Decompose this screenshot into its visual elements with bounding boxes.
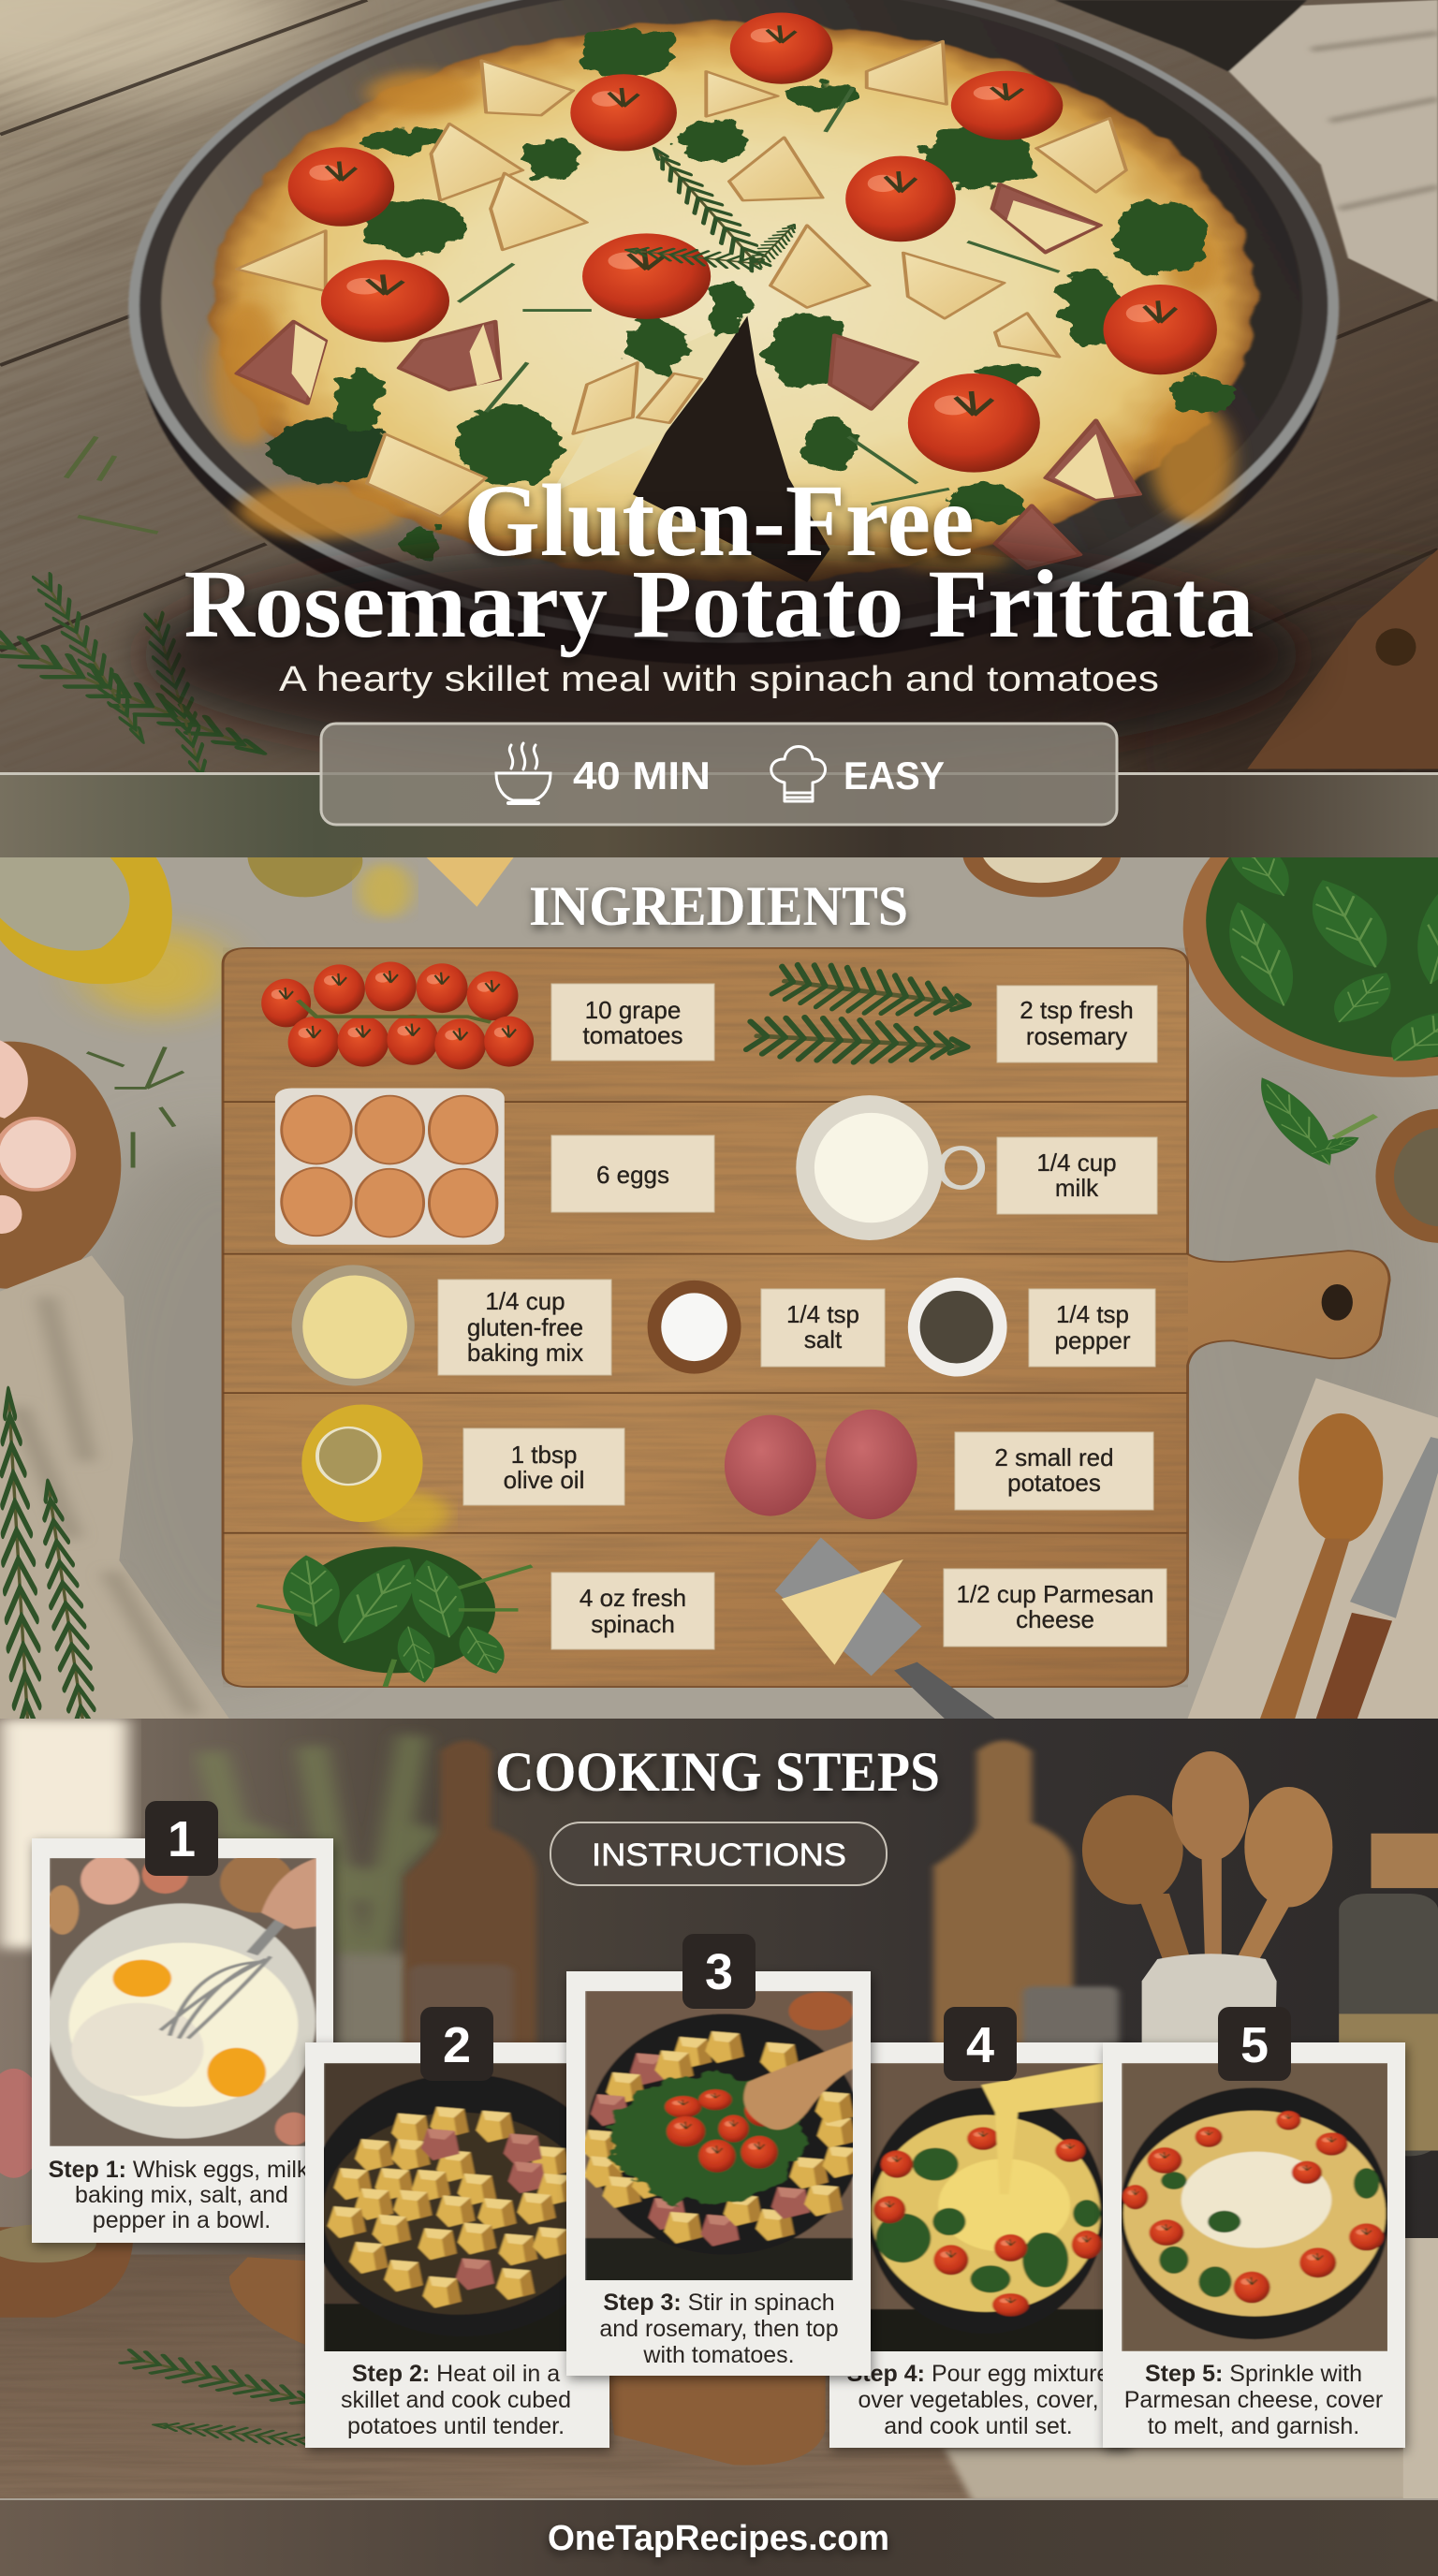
dark scrim behind title	[140, 543, 1301, 768]
wooden spoon	[1260, 1413, 1383, 1719]
step 1 text: baking mix, salt, and	[75, 2182, 288, 2208]
pepper bowl	[908, 1278, 1007, 1377]
potatoes	[481, 61, 573, 115]
step 5 text: to melt, and garnish.	[1148, 2413, 1359, 2439]
footer band	[0, 2498, 1438, 2576]
step 2 photo	[307, 2063, 619, 2353]
red potatoes	[725, 1410, 917, 1519]
step 3 card	[566, 1934, 871, 2376]
badge 3	[682, 1934, 756, 2009]
ingredient labels	[438, 984, 1167, 1649]
countertop background and props	[0, 781, 1438, 1732]
spinach	[268, 27, 1235, 558]
subtitle: A hearty skillet meal with spinach and tomatoes	[279, 660, 1159, 699]
badge 5	[1218, 2007, 1291, 2081]
label: spinach: spinach	[591, 1610, 675, 1638]
ingredients section	[0, 781, 1438, 1732]
icon: chef hat	[771, 747, 826, 801]
blurred plant	[211, 1735, 431, 2063]
step 3 text	[599, 2290, 839, 2368]
small oil jar	[247, 857, 362, 897]
olive oil dish	[301, 1404, 449, 1536]
label: salt: 1/4 tsp	[786, 1300, 859, 1328]
badge 4	[944, 2007, 1017, 2081]
small herb bits	[87, 1046, 183, 1168]
step 5 text: Step 5: Sprinkle with	[1145, 2361, 1362, 2387]
salt bowl	[648, 1281, 741, 1374]
label: red potatoes: potatoes	[1007, 1469, 1101, 1497]
step 1 text	[49, 2157, 315, 2233]
white crock	[1142, 1954, 1277, 2057]
badge 4: 4	[966, 2017, 994, 2073]
baking mix bowl	[292, 1265, 415, 1386]
label: baking mix: baking mix	[467, 1339, 583, 1367]
label: olive oil	[463, 1428, 624, 1505]
label: salt	[761, 1289, 885, 1367]
olive oil bottle	[0, 857, 229, 1017]
label: baking mix	[438, 1280, 611, 1375]
label: milk	[997, 1137, 1157, 1214]
heading: COOKING STEPS	[495, 1741, 940, 1803]
tomatoes	[730, 12, 832, 84]
label: rosemary: rosemary	[1026, 1022, 1127, 1050]
badge 2: 2	[443, 2017, 471, 2073]
hero section	[0, 0, 1438, 857]
title: Rosemary Potato Frittata	[183, 550, 1255, 658]
linen	[945, 2449, 1438, 2500]
step 4 card	[829, 2007, 1129, 2448]
label: eggs: 6 eggs	[596, 1161, 669, 1189]
blurred cutting boards	[404, 1740, 1073, 2057]
wooden bowl of cheese	[963, 857, 1121, 897]
label: rosemary: 2 tsp fresh	[1020, 996, 1134, 1024]
step 5 text	[1124, 2361, 1383, 2439]
label: milk: 1/4 cup	[1036, 1149, 1117, 1177]
title: Gluten-Free	[464, 463, 974, 578]
cooking steps section	[0, 1719, 1438, 2576]
instructions pill: INSTRUCTIONS	[592, 1837, 846, 1873]
badge 5: 5	[1240, 2017, 1269, 2073]
label: salt: salt	[804, 1325, 843, 1354]
instructions pill	[550, 1822, 887, 1885]
rosemary on table	[119, 2347, 332, 2448]
badge 2	[420, 2007, 493, 2081]
step 2 text: Step 2: Heat oil in a	[352, 2361, 560, 2387]
step 4 text: and cook until set.	[884, 2413, 1073, 2439]
label: pepper: 1/4 tsp	[1056, 1300, 1129, 1328]
label: baking mix: 1/4 cup	[485, 1287, 565, 1315]
label: olive oil: olive oil	[504, 1466, 584, 1494]
frosted band	[0, 772, 1438, 857]
wooden utensils	[1082, 1751, 1332, 1965]
cheese wedge	[427, 857, 514, 907]
icon: steaming bowl	[496, 743, 550, 803]
step 5 text: Parmesan cheese, cover	[1124, 2387, 1383, 2413]
step 2 text	[341, 2361, 571, 2439]
label: parmesan	[944, 1569, 1167, 1647]
label: parmesan: cheese	[1016, 1605, 1094, 1633]
knife	[1316, 1437, 1438, 1719]
step 2 text: skillet and cook cubed	[341, 2387, 571, 2413]
wooden spoon	[1247, 549, 1438, 769]
loose spinach leaves	[1243, 1073, 1375, 1170]
label: baking mix: gluten-free	[467, 1313, 583, 1341]
spinach bowl	[1183, 781, 1438, 1077]
step 3 text: and rosemary, then top	[599, 2316, 839, 2342]
step 5 card	[1103, 2007, 1405, 2448]
label: pepper	[1029, 1289, 1155, 1367]
frittata	[211, 12, 1256, 582]
wood block	[229, 2257, 826, 2466]
rosemary garnish	[652, 147, 771, 273]
label: spinach: 4 oz fresh	[580, 1584, 686, 1612]
badge 1: 1	[168, 1811, 196, 1867]
hero photo: skillet frittata on wood	[0, 0, 1438, 772]
spinach	[257, 1546, 532, 1721]
egg shell plate	[0, 1039, 121, 1289]
time: 40 MIN	[573, 754, 711, 798]
label: rosemary	[997, 986, 1157, 1062]
label: red potatoes	[955, 1432, 1153, 1510]
loose rosemary	[0, 630, 268, 755]
egg carton	[275, 1088, 505, 1245]
heading: INGREDIENTS	[529, 875, 908, 937]
difficulty: EASY	[844, 754, 945, 798]
cheese and grater	[775, 1537, 995, 1719]
label: spinach	[551, 1573, 714, 1649]
jars	[408, 1965, 1119, 2052]
title	[183, 463, 1255, 658]
step 4 photo	[844, 2063, 1105, 2353]
right napkin	[1188, 1378, 1438, 1719]
left rosemary	[0, 1390, 99, 1732]
kitchen background	[0, 1719, 1438, 2576]
step 4 text: Step 4: Pour egg mixture	[847, 2361, 1109, 2387]
step 5 photo	[1120, 2063, 1389, 2351]
label: pepper: pepper	[1055, 1326, 1131, 1354]
grape tomatoes	[261, 961, 534, 1070]
step 4 text: over vegetables, cover,	[858, 2387, 1099, 2413]
spice bowl	[1375, 1109, 1438, 1243]
label: olive oil: 1 tbsp	[511, 1441, 577, 1469]
step 2 text: potatoes until tender.	[347, 2413, 565, 2439]
label: grape tomatoes: 10 grape	[585, 996, 681, 1024]
badge 3: 3	[705, 1944, 733, 2000]
milk cup	[796, 1095, 981, 1240]
step 3 text: with tomatoes.	[642, 2342, 795, 2368]
rosemary	[745, 959, 976, 1068]
step 1 card	[32, 1801, 333, 2243]
skillet	[128, 0, 1438, 665]
label: parmesan: 1/2 cup Parmesan	[956, 1580, 1154, 1608]
step 1 photo	[46, 1852, 316, 2146]
step 4 text	[847, 2361, 1109, 2439]
step 3 photo	[581, 1991, 862, 2282]
cutting board	[223, 948, 1389, 1687]
label: red potatoes: 2 small red	[994, 1443, 1114, 1471]
time and difficulty pill	[321, 724, 1117, 825]
label: milk: milk	[1055, 1174, 1099, 1202]
website: OneTapRecipes.com	[548, 2519, 889, 2558]
window light	[0, 1719, 128, 1948]
label: eggs	[551, 1135, 714, 1212]
step 3 text: Step 3: Stir in spinach	[603, 2290, 835, 2316]
left props	[0, 2069, 133, 2318]
left cloth	[0, 1255, 229, 1719]
badge 1	[145, 1801, 218, 1876]
step 1 text: Step 1: Whisk eggs, milk,	[49, 2157, 315, 2183]
glass bottle	[1339, 1834, 1438, 2156]
step 1 text: pepper in a bowl.	[93, 2207, 271, 2233]
label: grape tomatoes: tomatoes	[583, 1021, 682, 1049]
wedge cut	[633, 315, 830, 582]
label: grape tomatoes	[551, 984, 714, 1061]
step 2 card	[305, 2007, 619, 2448]
